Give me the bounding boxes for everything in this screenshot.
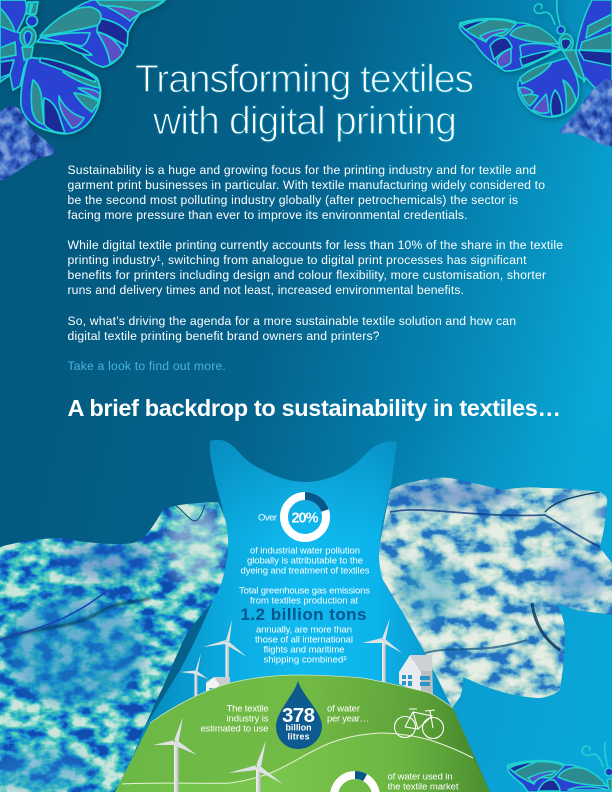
title: with digital printing xyxy=(152,100,457,143)
intro paragraph 3: So, what’s driving the agenda for a more sustainable textile solution and how can xyxy=(68,314,516,328)
dress silhouette xyxy=(115,440,490,792)
intro paragraph 3 xyxy=(68,314,516,343)
fabric: right scarf xyxy=(375,470,612,715)
fabric: left scarf xyxy=(0,495,235,792)
water market text xyxy=(388,772,459,792)
title xyxy=(135,58,474,143)
donut chart: 20% xyxy=(258,492,329,538)
water drop: 378 billion litres: 378 xyxy=(282,704,315,727)
donut chart: lower xyxy=(330,771,380,792)
call to action: Take a look to find out more. xyxy=(68,359,226,373)
water drop: 378 billion litres: billion xyxy=(286,722,312,732)
water use text right: per year… xyxy=(327,714,369,724)
butterfly: top right xyxy=(459,0,612,117)
house: small xyxy=(206,677,230,698)
water market text: of water used in xyxy=(388,772,452,782)
greenhouse gas text: from textiles production at xyxy=(250,595,358,606)
water drop: 378 billion litres: litres xyxy=(288,732,310,742)
intro paragraph 2 xyxy=(68,238,563,297)
intro paragraph 1 xyxy=(68,163,545,222)
water pollution text: of industrial water pollution xyxy=(250,545,360,556)
intro paragraph 2: runs and delivery times and not least, increased environmental benefits. xyxy=(68,283,464,297)
greenhouse gas comparison text: annually, are more than xyxy=(256,624,352,635)
intro paragraph 2: printing industry¹, switching from analogue to digital print processes has significant xyxy=(68,253,527,267)
feather tuft: left xyxy=(0,106,56,180)
water use text left: The textile xyxy=(226,704,268,714)
water pollution text: dyeing and treatment of textiles xyxy=(240,565,370,576)
donut chart: 20%: 20% xyxy=(292,510,319,526)
wind turbine: on hill left xyxy=(153,717,197,792)
page background xyxy=(206,0,612,792)
intro paragraph 2: benefits for printers including design and colour flexibility, more customisation, shorter xyxy=(68,268,546,282)
intro paragraph 1: be the second most polluting industry globally (after petrochemicals) the sector is xyxy=(68,193,518,207)
water pollution text: globally is attributable to the xyxy=(247,555,363,566)
wind turbine: on hill centre xyxy=(228,740,283,792)
water use text left: industry is xyxy=(226,714,269,724)
greenhouse gas text xyxy=(239,585,370,606)
water pollution text xyxy=(240,545,370,576)
water use text left: estimated to use xyxy=(200,724,268,734)
water use text right: of water xyxy=(327,704,360,714)
water drop: 378 billion litres xyxy=(276,681,322,749)
intro paragraph 1: garment print businesses in particular. With textile manufacturing widely considered to xyxy=(68,178,545,192)
greenhouse gas text: Total greenhouse gas emissions xyxy=(239,585,370,596)
intro paragraph 2: While digital textile printing currently accounts for less than 10% of the share in the textile xyxy=(68,238,563,252)
wind turbine: upper left xyxy=(203,620,247,692)
intro paragraph 1: facing more pressure than ever to improve its environmental credentials. xyxy=(68,208,468,222)
greenhouse gas comparison text xyxy=(255,624,353,665)
wind turbine: upper right xyxy=(362,618,402,686)
intro paragraph 1: Sustainability is a huge and growing focus for the printing industry and for textile and xyxy=(68,163,536,177)
water use text left xyxy=(200,704,269,734)
feather tuft: right xyxy=(558,78,612,146)
butterfly: top left xyxy=(0,0,165,134)
title: Transforming textiles xyxy=(135,58,474,101)
green hill: upper xyxy=(115,675,490,792)
intro paragraph 3: digital textile printing benefit brand owners and printers? xyxy=(68,329,380,343)
house: large xyxy=(399,655,433,695)
water use text right xyxy=(327,704,369,724)
donut chart: 20%: Over xyxy=(258,512,277,524)
section heading: A brief backdrop to sustainability in textiles… xyxy=(68,395,561,421)
wind turbine: small xyxy=(180,653,208,706)
greenhouse gas comparison text: those of all international xyxy=(255,634,353,645)
butterfly: bottom right xyxy=(507,742,612,792)
greenhouse gas comparison text: shipping combined² xyxy=(264,654,346,665)
greenhouse gas comparison text: flights and maritime xyxy=(264,644,344,655)
big figure: 1.2 billion tons: 1.2 billion tons xyxy=(240,605,366,624)
icon: bicycle xyxy=(394,709,444,738)
green hill: lower xyxy=(115,733,490,792)
